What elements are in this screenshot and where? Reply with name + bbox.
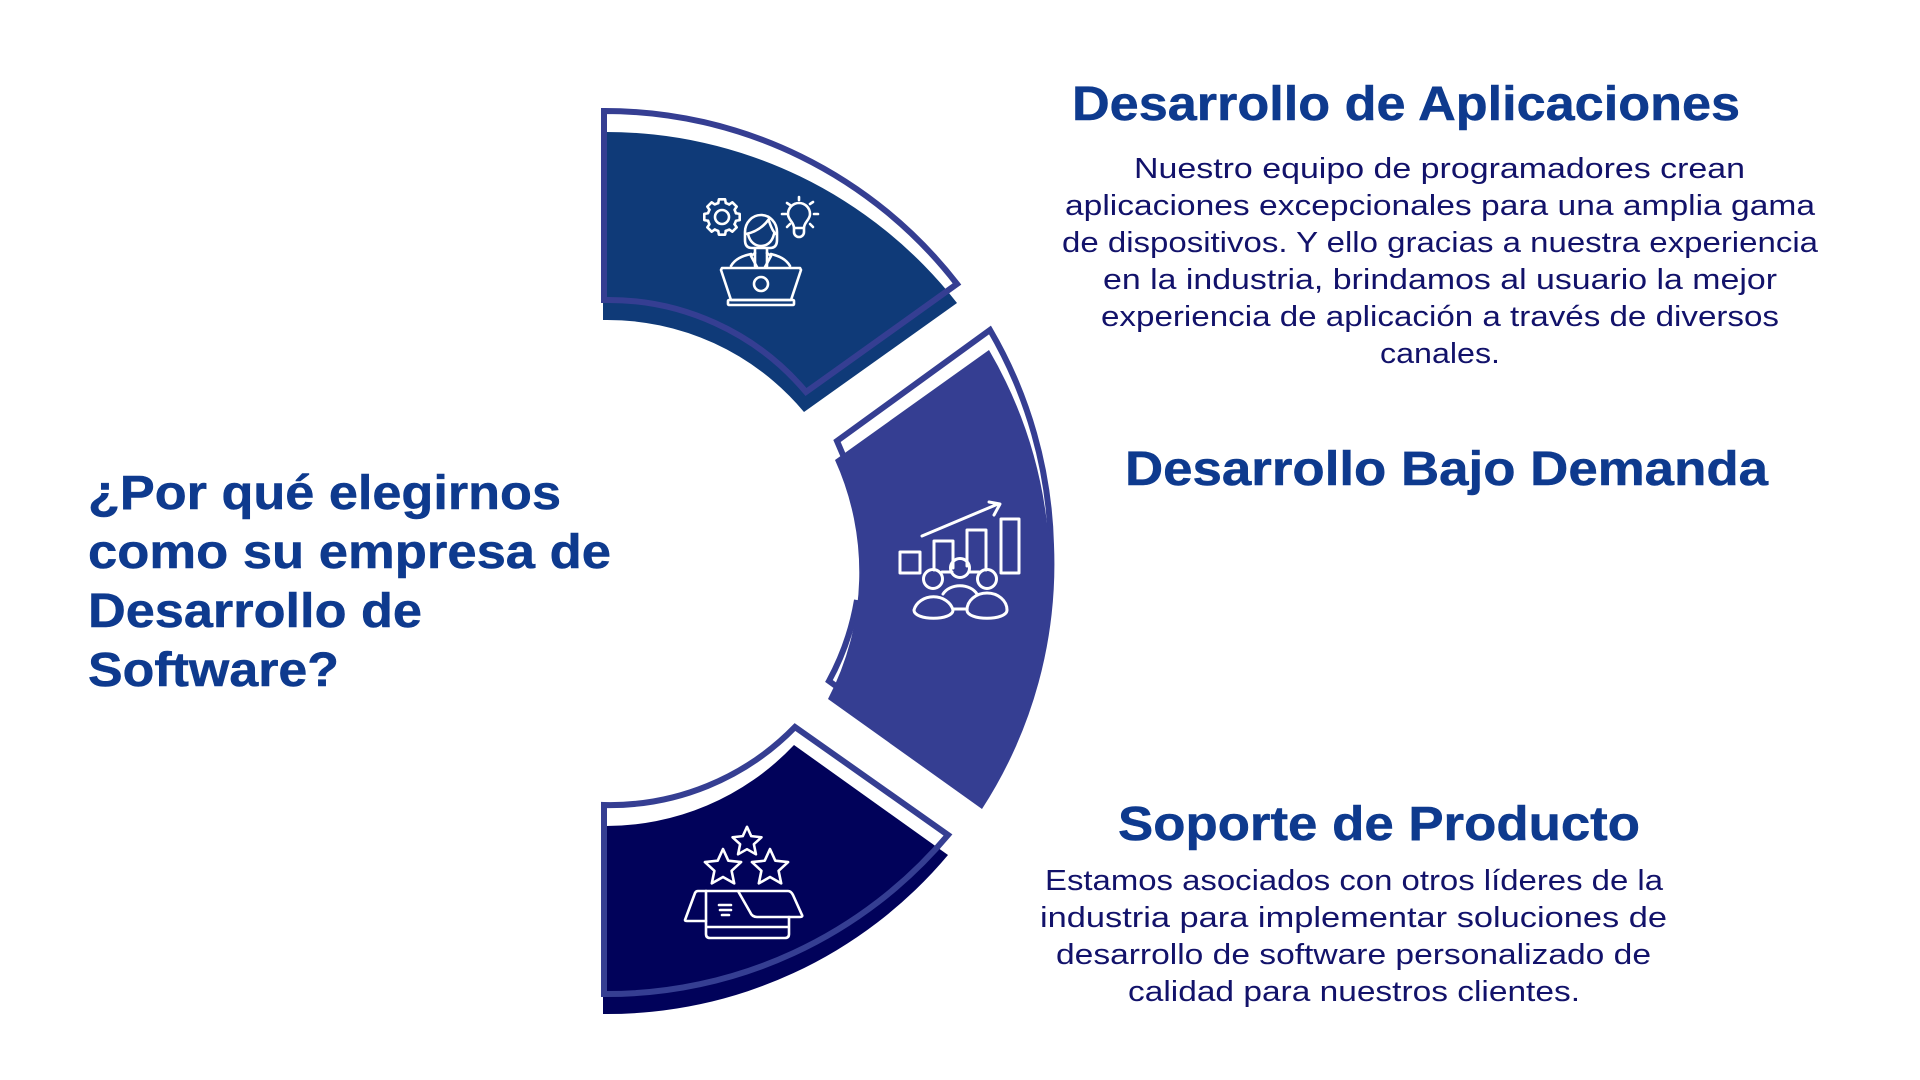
middle segment fill (828, 350, 1054, 809)
icon: developer with laptop, gear and light bulb (704, 197, 818, 305)
text block: product support description: desarrollo de software personalizado de (1056, 939, 1651, 971)
bottom segment outline (604, 727, 948, 994)
text block: product support description (1040, 865, 1667, 1008)
text block: application development description: canales. (1380, 338, 1500, 370)
heading: Desarrollo Bajo Demanda: Desarrollo Bajo Demanda (1125, 443, 1768, 496)
text block: product support description: industria para implementar soluciones de (1040, 902, 1667, 934)
text block: application development description: en la industria, brindamos al usuario la mejor (1103, 264, 1777, 296)
text block: application development description: experiencia de aplicación a través de diversos (1101, 301, 1779, 333)
heading: Desarrollo de Aplicaciones: Desarrollo de Aplicaciones (1072, 78, 1740, 131)
bottom segment fill (603, 745, 948, 1014)
text block: application development description (1062, 153, 1819, 370)
icon: open box with stars (685, 827, 802, 938)
middle segment outline (829, 330, 1051, 790)
heading: Soporte de Producto: Soporte de Producto (1118, 798, 1640, 851)
panel: middle ring segment (828, 330, 1054, 809)
panel: top ring segment (603, 111, 957, 412)
text block: product support description: calidad para nuestros clientes. (1128, 976, 1580, 1008)
heading: why choose us: Desarrollo de (88, 585, 422, 638)
icon: growth chart with team (900, 502, 1019, 618)
panel: bottom ring segment (603, 727, 948, 1014)
text block: application development description: Nuestro equipo de programadores crean (1134, 153, 1745, 185)
heading: why choose us: Software? (88, 644, 339, 697)
heading: why choose us: como su empresa de (88, 526, 611, 579)
heading: why choose us: ¿Por qué elegirnos (88, 467, 561, 520)
text block: product support description: Estamos asociados con otros líderes de la (1045, 865, 1664, 897)
text block: application development description: de dispositivos. Y ello gracias a nuestra experiencia (1062, 227, 1819, 259)
text block: application development description: aplicaciones excepcionales para una amplia gama (1065, 190, 1816, 222)
heading: why choose us (88, 467, 611, 697)
top segment fill (603, 132, 957, 412)
top segment outline (604, 111, 957, 392)
